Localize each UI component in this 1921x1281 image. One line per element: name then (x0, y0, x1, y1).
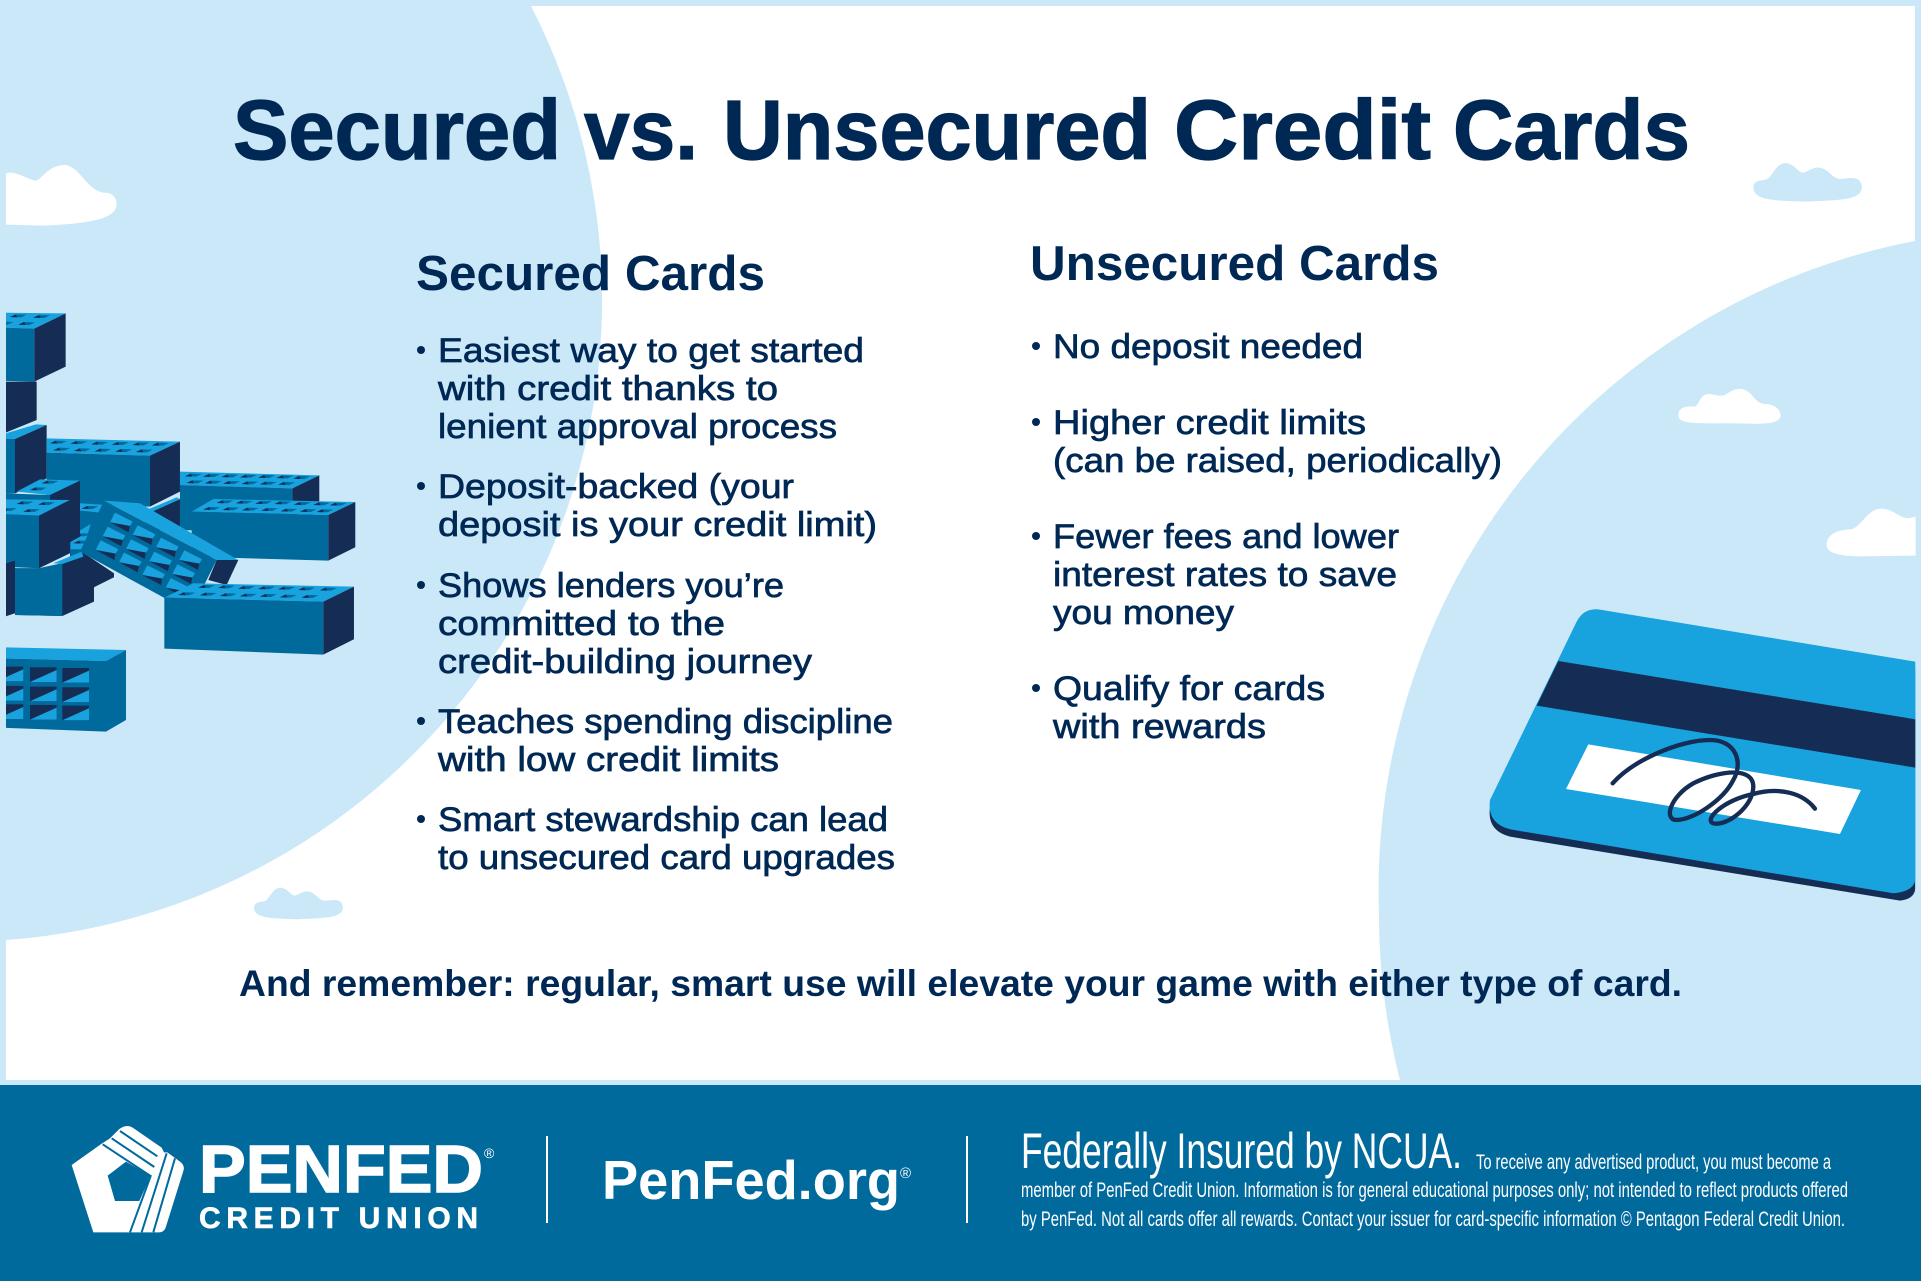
right light blue circle (1379, 241, 1915, 1080)
bullet list: secured cards: credit-building journey (438, 643, 812, 681)
cloud: top left (6, 165, 117, 226)
bullet list: unsecured cards: you money (1053, 594, 1234, 632)
title: Unsecured (723, 83, 1151, 177)
bullet list: secured cards: Teaches spending discipline (438, 703, 893, 741)
bullet list: secured cards: Shows lenders you’re (438, 567, 784, 605)
bullet list: secured cards: with low credit limits (437, 741, 779, 779)
website: PenFed.org (602, 1149, 900, 1211)
heading: secured cards: Secured Cards (416, 247, 765, 301)
registered mark: ® (900, 1165, 911, 1182)
title (233, 83, 1690, 177)
title: Secured (233, 83, 561, 177)
bullet list: secured cards: Smart stewardship can lead (438, 801, 888, 839)
bullet list: secured cards: Deposit-backed (your (438, 468, 794, 506)
cloud: lower right (1827, 509, 1916, 556)
bullet list: unsecured cards: Fewer fees and lower (1053, 518, 1399, 556)
bullet list: secured cards: lenient approval process (438, 408, 837, 446)
bullet list: unsecured cards: with rewards (1052, 708, 1266, 746)
bullet list: secured cards (417, 332, 895, 877)
icon: credit card back (1490, 609, 1915, 901)
title: vs. (584, 83, 698, 177)
icon: pile of bricks (0, 313, 355, 732)
bullet list: secured cards: deposit is your credit limit) (438, 506, 877, 544)
left light blue circle (6, 6, 602, 940)
bullet list: unsecured cards: interest rates to save (1053, 556, 1397, 594)
footer band (0, 1085, 1921, 1281)
divider (966, 1136, 968, 1223)
bullet list: secured cards: Easiest way to get started (438, 332, 864, 370)
cloud: bottom left (254, 888, 343, 919)
title: Credit (1174, 83, 1431, 177)
bullet list: unsecured cards: Qualify for cards (1053, 670, 1325, 708)
bullet list: secured cards: to unsecured card upgrades (438, 839, 895, 877)
divider (546, 1136, 548, 1223)
logo text: credit union: CREDIT UNION (199, 1202, 478, 1235)
cloud: middle right (1678, 389, 1781, 424)
logo text: PENFED: PENFED (199, 1132, 483, 1207)
bullet list: unsecured cards: No deposit needed (1053, 328, 1363, 366)
registered mark: ® (484, 1145, 495, 1161)
cloud: top right (1753, 163, 1862, 202)
panel: unsecured cards (1030, 237, 1502, 746)
bullet list: unsecured cards: Higher credit limits (1053, 404, 1366, 442)
bullet list: secured cards: with credit thanks to (437, 370, 778, 408)
title: Cards (1453, 83, 1690, 177)
bullet list: secured cards: committed to the (438, 605, 725, 643)
bullet list: unsecured cards (1032, 328, 1502, 746)
bullet list: unsecured cards: (can be raised, periodically) (1053, 442, 1502, 480)
heading: unsecured cards: Unsecured Cards (1030, 237, 1439, 291)
panel: secured cards (416, 247, 895, 877)
closing remark: And remember: regular, smart use will elevate your game with either type of card. (239, 963, 1682, 1004)
disclaimer: Federally Insured by NCUA. (1021, 1123, 1462, 1179)
logo: PenFed pentagon mark (72, 1126, 184, 1232)
disclaimer (1021, 1123, 1848, 1231)
